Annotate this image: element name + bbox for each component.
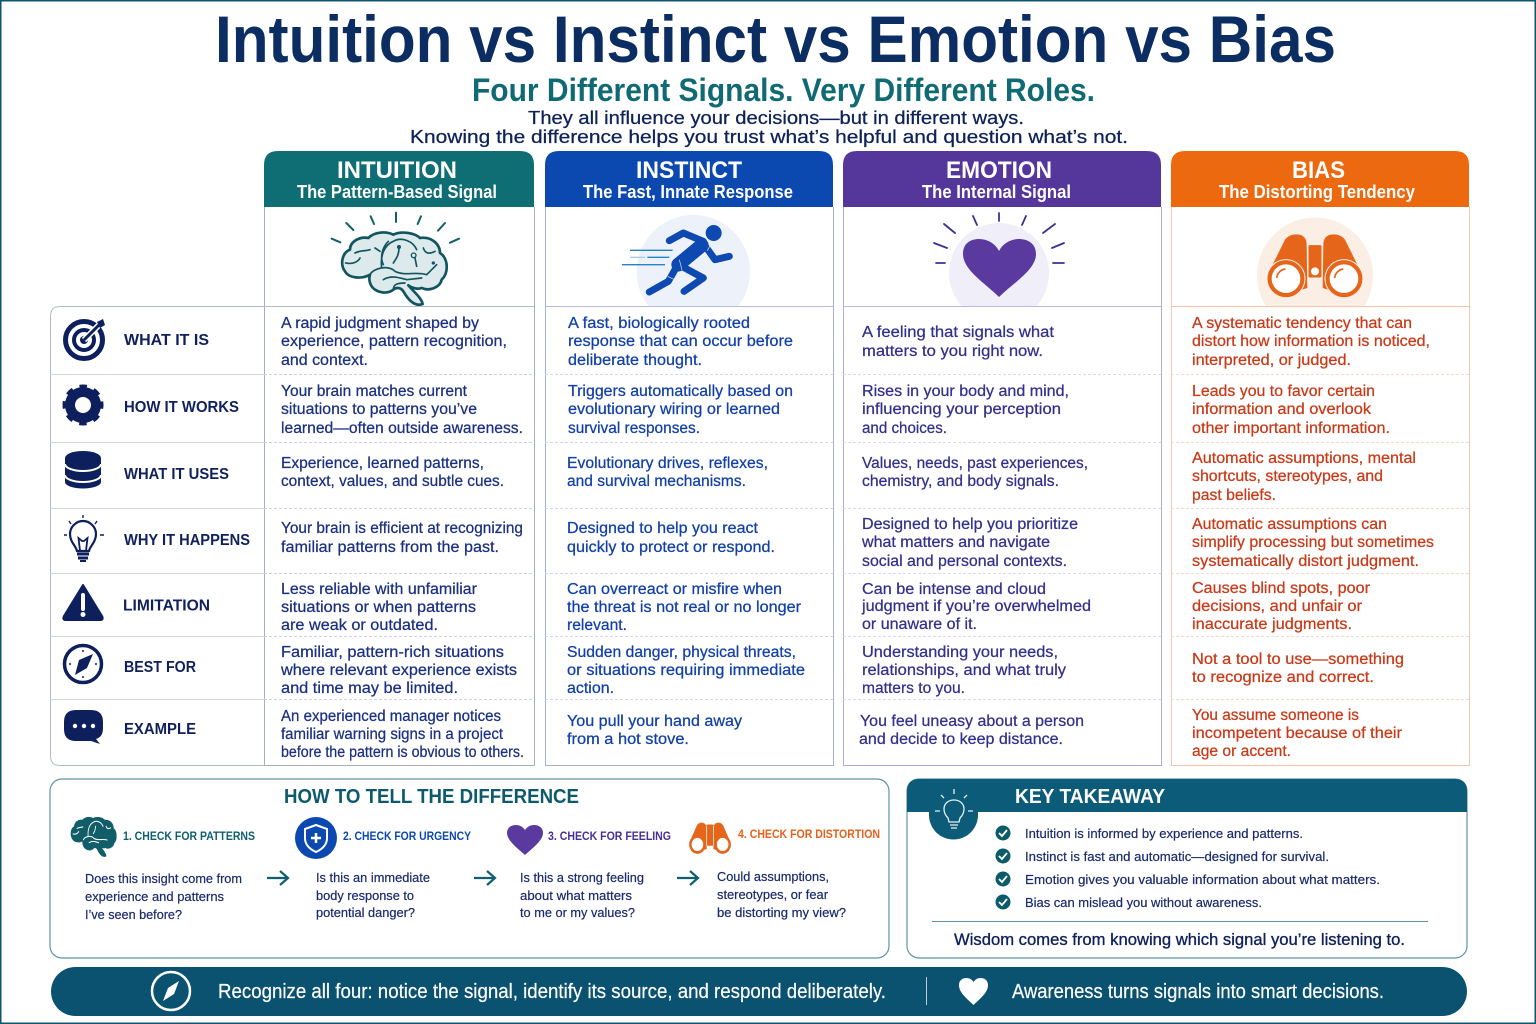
text: instinct best for	[567, 644, 805, 697]
text: emotion how it works: and choices.	[862, 420, 947, 437]
icon: small heart	[507, 825, 543, 855]
checklist: Intuition is informed by experience and patterns.	[1025, 826, 1303, 841]
text: intuition how it works	[281, 383, 523, 437]
step 2 text: potential danger?	[316, 905, 415, 920]
icon: small binoculars	[689, 823, 731, 854]
step 4 text	[717, 869, 846, 920]
text: instinct why it happens	[567, 520, 775, 556]
icon: light bulb	[64, 515, 104, 561]
text: bias limitation: inaccurate judgments.	[1192, 616, 1352, 633]
panel: how to tell the difference	[50, 779, 889, 958]
text: instinct what it is: A fast, biologically rooted	[568, 315, 750, 332]
step 2 text: body response to	[316, 888, 414, 903]
text: intuition best for: where relevant experience exists	[280, 662, 517, 679]
footer message 2: Awareness turns signals into smart decisions.	[1012, 981, 1384, 1003]
panel: intuition column	[264, 151, 534, 766]
text: emotion best for: matters to you.	[862, 680, 965, 697]
step 1 heading: 1. CHECK FOR PATTERNS	[123, 829, 255, 843]
intro text	[410, 108, 1128, 147]
icon: speech bubble	[64, 710, 103, 744]
text: emotion best for: relationships, and what truly	[862, 662, 1066, 679]
text: bias limitation: Causes blind spots, poor	[1192, 580, 1370, 597]
text: instinct what it is	[568, 315, 793, 369]
label: what it uses: WHAT IT USES	[124, 466, 229, 483]
text: instinct how it works: evolutionary wiring or learned	[568, 401, 780, 418]
heading: intuition: INTUITION	[337, 157, 457, 184]
icon: gear	[65, 387, 101, 423]
text: instinct what it is: response that can occur before	[568, 333, 793, 350]
heading: emotion: EMOTION	[946, 157, 1052, 184]
subheading: intuition: The Pattern-Based Signal	[297, 182, 497, 202]
step 1 text: experience and patterns	[85, 889, 224, 904]
step 4 heading: 4. CHECK FOR DISTORTION	[738, 827, 880, 841]
text: bias why it happens	[1192, 516, 1434, 570]
text: bias how it works: information and overlook	[1192, 401, 1371, 418]
text: bias what it is: interpreted, or judged.	[1192, 352, 1351, 369]
arrow 1	[267, 871, 288, 885]
text: bias why it happens: Automatic assumptions can	[1192, 516, 1387, 533]
text: emotion limitation	[861, 581, 1091, 633]
text: instinct example	[567, 713, 742, 748]
step 3 text	[520, 870, 644, 920]
step 4 text: stereotypes, or fear	[717, 887, 829, 902]
label: example: EXAMPLE	[124, 721, 196, 738]
text: emotion what it is: matters to you right now.	[862, 343, 1043, 360]
text: instinct best for: or situations requiring immediate	[567, 662, 805, 679]
text: intuition best for	[280, 644, 517, 697]
text: bias what it is	[1192, 315, 1430, 369]
icon: compass	[64, 646, 102, 682]
text: emotion why it happens: Designed to help you prioritize	[862, 516, 1078, 533]
icon: shield	[295, 817, 337, 859]
text: instinct what it is: deliberate thought.	[568, 352, 702, 369]
icon: running figure	[622, 215, 750, 306]
text: emotion limitation: Can be intense and cloud	[862, 581, 1046, 598]
text: emotion why it happens	[861, 516, 1078, 570]
step 2 text	[316, 870, 430, 920]
panel: row labels	[50, 306, 264, 766]
icon: database	[65, 451, 101, 488]
label: limitation: LIMITATION	[123, 598, 210, 614]
intro text: They all influence your decisions—but in different ways.	[528, 108, 1024, 128]
text: emotion how it works	[862, 383, 1069, 437]
title: Intuition vs Instinct vs Emotion vs Bias	[215, 2, 1336, 76]
text: emotion what it uses: Values, needs, past experiences,	[862, 455, 1088, 472]
icon: bulb badge	[929, 789, 978, 839]
step 1 text: I’ve seen before?	[85, 907, 182, 922]
text: intuition example: familiar warning signs in a project	[281, 726, 504, 743]
text: intuition example: before the pattern is obvious to others.	[281, 744, 524, 761]
text: bias how it works	[1192, 383, 1390, 437]
text: bias what it uses: past beliefs.	[1192, 487, 1276, 504]
text: bias what it is: distort how information is noticed,	[1192, 333, 1430, 350]
text: emotion example: You feel uneasy about a person	[860, 713, 1084, 730]
text: instinct how it works: survival responses.	[568, 420, 700, 437]
text: intuition best for: and time may be limited.	[281, 680, 458, 697]
label: how it works: HOW IT WORKS	[124, 399, 239, 416]
text: intuition what it is	[281, 315, 507, 369]
icon: footer heart	[959, 978, 988, 1005]
text: emotion example	[859, 713, 1084, 748]
text: intuition example	[281, 708, 524, 761]
checklist: Emotion gives you valuable information about what matters.	[1025, 872, 1380, 887]
step 2 text: Is this an immediate	[316, 870, 430, 885]
text: intuition example: An experienced manager notices	[281, 708, 501, 725]
text: intuition best for: Familiar, pattern-rich situations	[281, 644, 504, 661]
text: instinct limitation: the threat is not real or no longer	[567, 599, 801, 616]
icon: brain	[332, 213, 459, 305]
footer message 1: Recognize all four: notice the signal, identify its source, and respond deliberately.	[218, 981, 886, 1003]
text: bias example: incompetent because of their	[1192, 725, 1402, 742]
text: instinct example: from a hot stove.	[567, 731, 689, 748]
arrow 2	[474, 871, 495, 885]
text: instinct why it happens: quickly to protect or respond.	[567, 539, 775, 556]
icon: heart	[934, 213, 1064, 306]
subheading: bias: The Distorting Tendency	[1219, 182, 1415, 202]
text: instinct example: You pull your hand away	[567, 713, 742, 730]
text: instinct how it works	[568, 383, 793, 437]
icon: target	[66, 319, 105, 358]
panel: instinct column	[545, 151, 834, 766]
checklist	[996, 826, 1380, 910]
icon: binoculars	[1257, 217, 1373, 306]
text: intuition what it is: experience, pattern recognition,	[281, 333, 507, 350]
heading: key takeaway: KEY TAKEAWAY	[1015, 786, 1166, 808]
text: emotion example: and decide to keep distance.	[859, 731, 1063, 748]
step 3 text: to me or my values?	[520, 905, 635, 920]
subheading: instinct: The Fast, Innate Response	[583, 182, 793, 202]
text: intuition why it happens: Your brain is efficient at recognizing	[281, 520, 523, 537]
text: bias what it is: A systematic tendency that can	[1192, 315, 1412, 332]
text: instinct limitation: relevant.	[567, 617, 627, 634]
step 1 text	[85, 871, 242, 922]
text: emotion best for	[862, 644, 1066, 697]
step 1 text: Does this insight come from	[85, 871, 242, 886]
text: intuition what it uses: Experience, learned patterns,	[281, 455, 484, 472]
text: bias best for	[1192, 651, 1404, 686]
text: bias what it uses: shortcuts, stereotypes, and	[1192, 468, 1383, 485]
text: intuition what it is: and context.	[281, 352, 368, 369]
icon: small brain	[71, 818, 116, 856]
text: bias what it uses	[1192, 450, 1416, 504]
arrow 3	[677, 871, 698, 885]
icon: footer compass	[152, 972, 190, 1010]
subtitle: Four Different Signals. Very Different Roles.	[472, 72, 1095, 108]
text: instinct best for: Sudden danger, physical threats,	[567, 644, 796, 661]
text: bias why it happens: simplify processing but sometimes	[1192, 534, 1434, 551]
text: emotion how it works: influencing your perception	[862, 401, 1061, 418]
text: bias how it works: other important information.	[1192, 420, 1390, 437]
text: emotion what it is	[862, 324, 1055, 360]
text: bias example: age or accent.	[1192, 743, 1291, 760]
text: instinct best for: action.	[567, 680, 614, 697]
text: emotion best for: Understanding your needs,	[862, 644, 1058, 661]
text: intuition what it uses: context, values, and subtle cues.	[281, 473, 504, 490]
label: why it happens: WHY IT HAPPENS	[124, 532, 250, 549]
text: emotion what it uses: chemistry, and body signals.	[862, 473, 1059, 490]
text: instinct why it happens: Designed to help you react	[567, 520, 759, 537]
text: intuition what it is: A rapid judgment shaped by	[281, 315, 479, 332]
text: intuition limitation: situations or when patterns	[281, 599, 476, 616]
step 3 text: about what matters	[520, 888, 633, 903]
text: bias limitation	[1192, 580, 1370, 633]
text: instinct limitation	[567, 581, 801, 634]
text: intuition limitation: Less reliable with unfamiliar	[281, 581, 477, 598]
step 4 text: Could assumptions,	[717, 869, 829, 884]
text: intuition limitation	[281, 581, 477, 634]
label: best for: BEST FOR	[124, 659, 196, 676]
heading: instinct: INSTINCT	[636, 157, 742, 184]
text: bias example: You assume someone is	[1192, 707, 1359, 724]
heading: how to tell the difference: HOW TO TELL THE DIFFERENCE	[284, 786, 579, 808]
text: emotion why it happens: what matters and navigate	[861, 534, 1050, 551]
key takeaway conclusion: Wisdom comes from knowing which signal you’re listening to.	[954, 930, 1405, 949]
step 3 text: Is this a strong feeling	[520, 870, 644, 885]
text: instinct what it uses: and survival mechanisms.	[567, 473, 746, 490]
text: bias how it works: Leads you to favor certain	[1192, 383, 1375, 400]
text: bias limitation: decisions, and unfair or	[1192, 598, 1362, 615]
checklist: Bias can mislead you without awareness.	[1025, 895, 1262, 910]
subheading: emotion: The Internal Signal	[922, 182, 1071, 202]
text: emotion how it works: Rises in your body and mind,	[862, 383, 1069, 400]
text: instinct limitation: Can overreact or misfire when	[567, 581, 782, 598]
text: emotion limitation: judgment if you’re overwhelmed	[861, 598, 1091, 615]
text: emotion what it uses	[862, 455, 1088, 490]
text: instinct how it works: Triggers automatically based on	[568, 383, 793, 400]
intro text: Knowing the difference helps you trust what’s helpful and question what’s not.	[410, 127, 1128, 147]
text: intuition what it uses	[281, 455, 504, 490]
checklist: Instinct is fast and automatic—designed for survival.	[1025, 849, 1329, 864]
panel: emotion column	[843, 151, 1162, 766]
panel: key takeaway	[907, 779, 1467, 958]
text: bias what it uses: Automatic assumptions, mental	[1192, 450, 1416, 467]
text: intuition how it works: situations to patterns you’ve	[281, 401, 477, 418]
text: instinct what it uses	[567, 455, 768, 490]
text: intuition why it happens: familiar patterns from the past.	[281, 539, 499, 556]
text: instinct what it uses: Evolutionary drives, reflexes,	[567, 455, 768, 472]
step 4 text: be distorting my view?	[717, 905, 846, 920]
text: intuition how it works: learned—often outside awareness.	[281, 420, 523, 437]
text: intuition limitation: are weak or outdated.	[281, 617, 438, 634]
label: what it is: WHAT IT IS	[124, 332, 209, 349]
footer banner	[51, 967, 1467, 1016]
step 3 heading: 3. CHECK FOR FEELING	[548, 829, 671, 843]
text: intuition how it works: Your brain matches current	[281, 383, 468, 400]
heading: bias: BIAS	[1292, 157, 1345, 184]
step 2 heading: 2. CHECK FOR URGENCY	[343, 829, 471, 843]
icon: warning triangle	[63, 585, 103, 620]
text: emotion what it is: A feeling that signals what	[862, 324, 1055, 341]
panel: bias column	[1171, 151, 1470, 766]
text: emotion why it happens: social and personal contexts.	[862, 553, 1067, 570]
text: bias example	[1192, 707, 1402, 760]
text: bias why it happens: systematically distort judgment.	[1192, 553, 1419, 570]
text: bias best for: to recognize and correct.	[1192, 669, 1374, 686]
text: intuition why it happens	[281, 520, 523, 556]
text: emotion limitation: or unaware of it.	[862, 616, 977, 633]
text: bias best for: Not a tool to use—something	[1192, 651, 1404, 668]
